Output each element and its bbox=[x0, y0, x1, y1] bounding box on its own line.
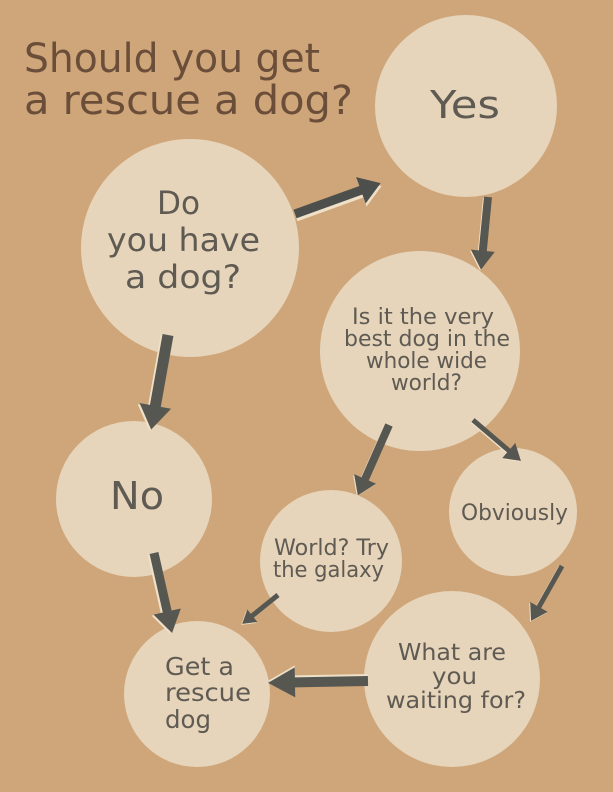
node: Is it the very best dog: whole wide bbox=[366, 349, 487, 374]
node: What are you waiting for?: What are bbox=[398, 640, 506, 666]
title: a rescue a dog? bbox=[24, 78, 353, 124]
node: Get a rescue dog bbox=[124, 621, 270, 767]
node: Obviously bbox=[449, 448, 577, 576]
title: Should you get bbox=[24, 36, 320, 82]
node: What are you waiting for?: waiting for? bbox=[386, 688, 526, 714]
node: Get a rescue dog: rescue bbox=[165, 678, 251, 707]
node: Do you have a dog?: Do bbox=[157, 184, 200, 222]
arrow: obviously to waiting bbox=[521, 561, 571, 627]
node: Yes bbox=[375, 15, 557, 197]
arrow: dog to yes bbox=[290, 170, 386, 230]
arrow: no to rescue bbox=[138, 550, 186, 637]
node: Get a rescue dog: Get a bbox=[165, 652, 234, 681]
arrow: yes to best dog bbox=[468, 196, 500, 272]
arrow: dog to no bbox=[133, 332, 184, 434]
arrow: best dog to obviously bbox=[466, 412, 527, 470]
node: World? Try the galaxy: World? Try bbox=[274, 536, 389, 561]
node: No: No bbox=[110, 474, 164, 518]
node: Is it the very best dog bbox=[320, 251, 520, 451]
node: Do you have a dog? bbox=[81, 139, 299, 357]
node: Is it the very best dog: world? bbox=[391, 371, 462, 396]
node: Do you have a dog?: you have bbox=[107, 221, 260, 259]
node: Get a rescue dog: dog bbox=[165, 705, 211, 734]
node: Obviously: Obviously bbox=[461, 501, 568, 526]
node: Is it the very best dog: Is it the very bbox=[352, 305, 494, 330]
node: What are you waiting for?: you bbox=[432, 664, 477, 690]
node: Do you have a dog?: a dog? bbox=[125, 258, 241, 296]
title bbox=[24, 36, 353, 124]
node: World? Try the galaxy: the galaxy bbox=[273, 558, 384, 583]
node: No bbox=[56, 421, 212, 577]
arrow: best dog to world bbox=[346, 420, 400, 501]
arrow: waiting to rescue bbox=[268, 664, 368, 698]
node: Is it the very best dog: best dog in the bbox=[344, 327, 510, 352]
arrow: world to rescue bbox=[236, 589, 283, 631]
node: World? Try the galaxy bbox=[260, 490, 402, 632]
node: What are you waiting for? bbox=[364, 591, 540, 767]
node: Yes: Yes bbox=[429, 83, 500, 127]
